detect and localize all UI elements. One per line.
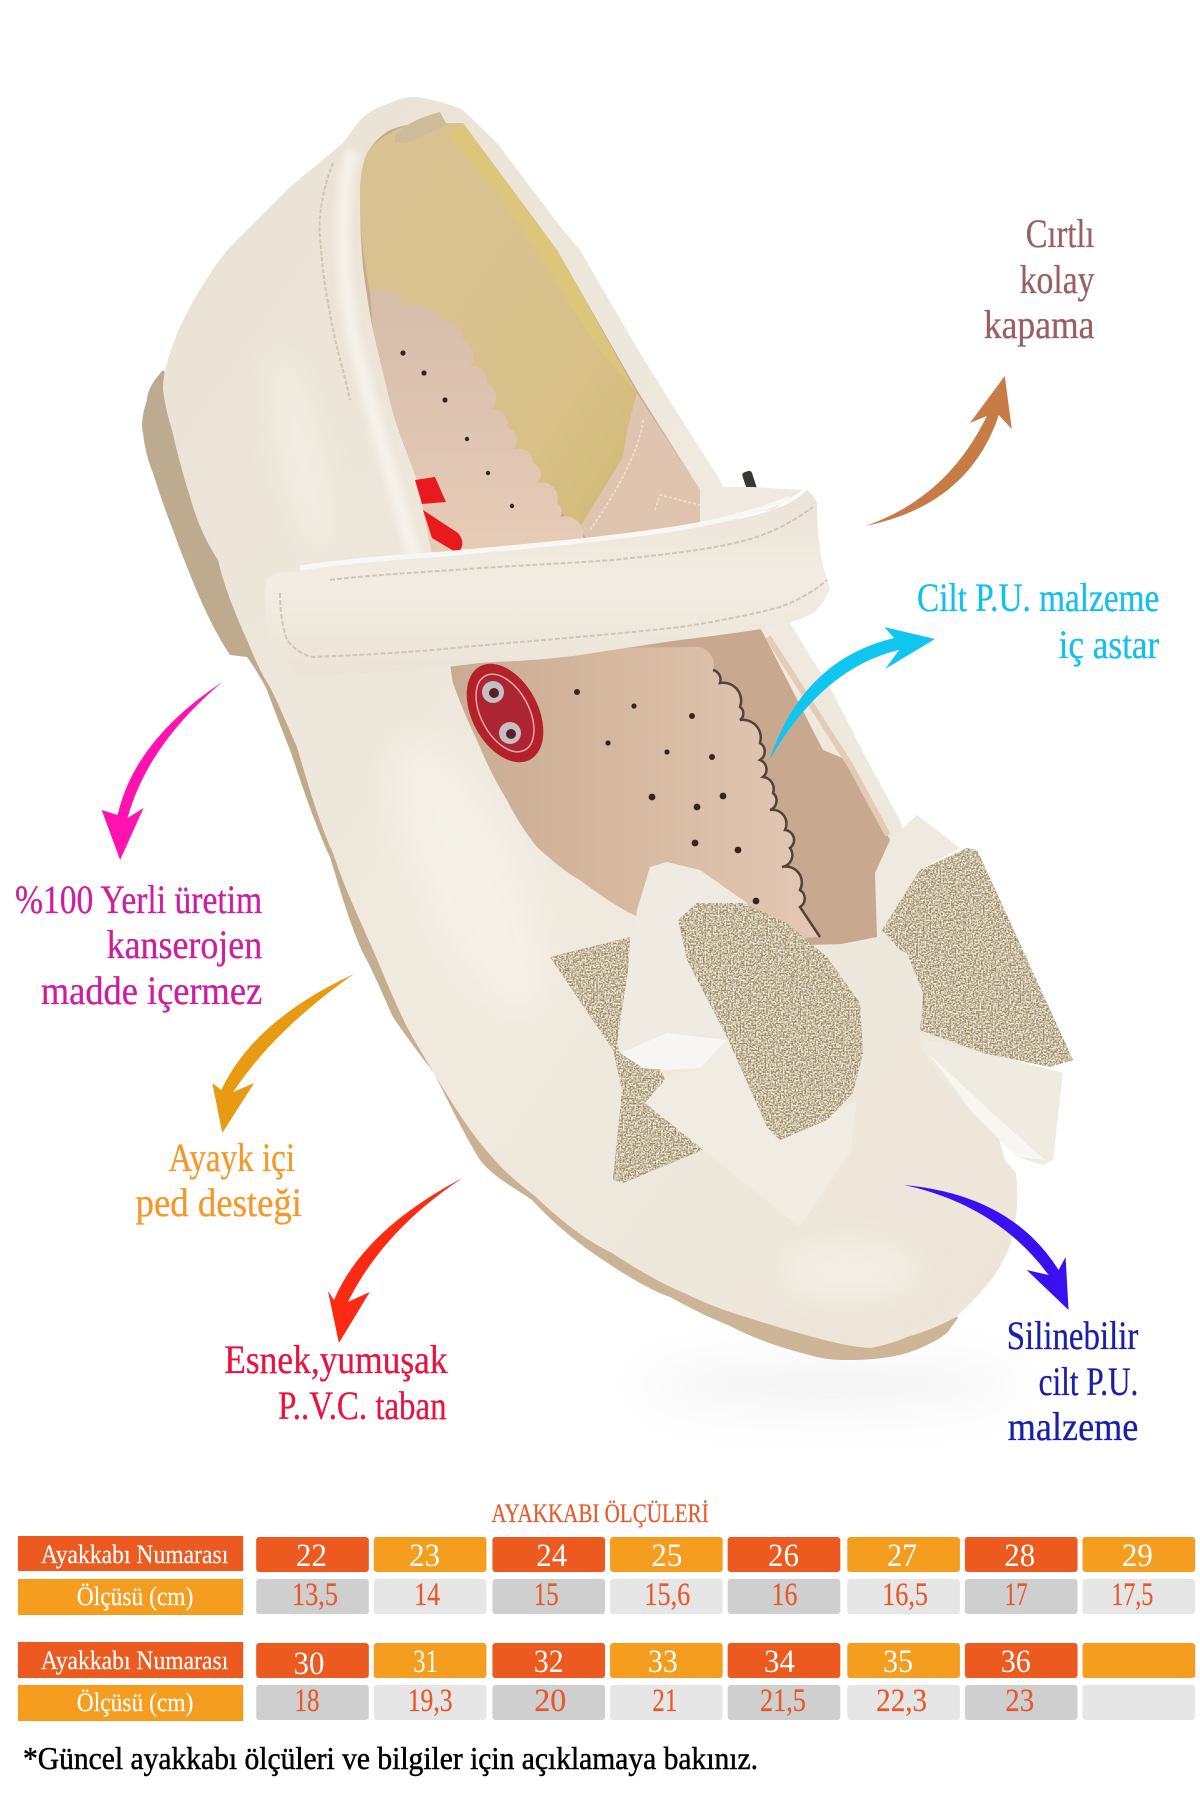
lining padded band: [447, 123, 637, 393]
size row 1 cells: 29: [1122, 1538, 1153, 1574]
measure row 1 cells: 17,5: [1111, 1577, 1153, 1613]
callout: yerli üretim: [15, 682, 262, 1013]
label text: [984, 211, 1095, 347]
label text: Silinebilir: [1007, 1313, 1138, 1358]
measure row 1 cells: 13,5: [292, 1577, 338, 1613]
size row 1 cells: [256, 1537, 1195, 1574]
row labels: Ölçüsü (cm): [77, 1688, 193, 1717]
scallop edge line: [713, 670, 820, 937]
size row 1 cells: 22: [296, 1538, 327, 1574]
label text: P..V.C. taban: [278, 1383, 447, 1428]
insole lower: [448, 647, 820, 945]
label text: kolay: [1020, 257, 1095, 302]
arrow: brown: [865, 376, 1012, 526]
owl badge: [451, 651, 559, 775]
label text: Cilt P.U. malzeme: [917, 575, 1159, 620]
label text: Ayayk içi: [168, 1135, 295, 1180]
size row 1 cells: 25: [651, 1538, 682, 1574]
rear collar fray: [395, 112, 447, 143]
measure row 1 cells: 16,5: [882, 1577, 928, 1613]
arrow: orange: [212, 974, 354, 1133]
size row 2 cells: 36: [1001, 1644, 1031, 1680]
size row 1 cells: 23: [409, 1538, 440, 1574]
strap velcro edge: [300, 498, 790, 568]
collar roll highlight: [343, 150, 415, 560]
measure row 1 cells: 14: [414, 1577, 440, 1613]
upper body: [163, 97, 1017, 1348]
right wing underside: [930, 1055, 1045, 1160]
size row 2 cells: 31: [413, 1644, 438, 1680]
velcro tab: [700, 487, 803, 513]
upper highlights: [252, 337, 920, 1298]
arrow: cyan: [770, 627, 935, 760]
footnote: *Güncel ayakkabı ölçüleri ve bilgiler için açıklamaya bakınız.: [23, 1740, 758, 1776]
label text: ped desteği: [136, 1180, 302, 1225]
measure row 2 cells: 21: [652, 1683, 677, 1719]
insole upper: [370, 289, 590, 560]
size row 2 cells: 32: [534, 1644, 564, 1680]
row labels: Ölçüsü (cm): [77, 1582, 193, 1611]
label text: kapama: [984, 302, 1095, 347]
callout: Cilt P.U. malzeme iç astar: [770, 575, 1159, 760]
label text: [136, 1135, 302, 1225]
size row 1 cells: 24: [536, 1538, 567, 1574]
label text: malzeme: [1008, 1404, 1138, 1449]
measure row 2 cells: 23: [1005, 1683, 1034, 1719]
label text: Cırtlı: [1026, 211, 1094, 256]
label text: Esnek,yumuşak: [224, 1337, 448, 1382]
measure row 1 cells: 15: [534, 1577, 559, 1613]
measure row 2 cells: [256, 1683, 1195, 1720]
size row 2 cells: 35: [883, 1644, 913, 1680]
label text: %100 Yerli üretim: [15, 877, 262, 922]
measure row 1 cells: [256, 1577, 1195, 1614]
label text: [15, 877, 262, 1013]
measure row 2 cells: 19,3: [408, 1683, 453, 1719]
row labels: [18, 1536, 243, 1721]
bow: [550, 815, 1073, 1227]
measure row 2 cells: 21,5: [760, 1683, 806, 1719]
center knot: [807, 943, 923, 1053]
right lower white wing: [917, 1038, 1063, 1165]
size row 1 cells: 27: [887, 1538, 917, 1574]
ground shadow: [640, 1357, 1020, 1413]
left top white wing: [617, 862, 747, 1053]
bottom white tail: [645, 1037, 857, 1227]
label text: cilt P.U.: [1039, 1359, 1138, 1404]
red logo mark: [415, 477, 462, 553]
label text: kanserojen: [107, 922, 262, 967]
callout: PVC taban: [224, 1178, 463, 1428]
callout: silinebilir: [904, 1185, 1138, 1449]
label text: iç astar: [1059, 622, 1159, 667]
opening inner wall: [360, 123, 890, 960]
size row 2 cells: 33: [648, 1644, 678, 1680]
measure row 1 cells: 15,6: [644, 1577, 690, 1613]
measure row 1 cells: 17: [1005, 1577, 1028, 1613]
measure row 2 cells: 18: [295, 1683, 319, 1719]
size row 1 cells: 28: [1004, 1538, 1035, 1574]
arrow: magenta: [102, 682, 222, 860]
row labels: Ayakkabı Numarası: [41, 1540, 228, 1569]
right glitter wing: [882, 848, 1073, 1067]
size row 1 cells: 26: [768, 1538, 799, 1574]
wing fold underside: [620, 1033, 727, 1070]
inner wall pink edge: [768, 637, 888, 835]
measure row 2 cells: 22,3: [876, 1683, 927, 1719]
shoe photo illustration: [142, 97, 1073, 1413]
size row 2 cells: 30: [294, 1646, 324, 1682]
strap: [265, 490, 830, 677]
arrow: red: [328, 1178, 463, 1343]
right top white wing: [875, 815, 960, 937]
label text: madde içermez: [41, 968, 262, 1013]
table title: AYAKKABI ÖLÇÜLERİ: [491, 1499, 709, 1528]
pink panel: [580, 393, 700, 540]
label text: [917, 575, 1159, 667]
snap detail: [742, 470, 758, 496]
heel stitching: [320, 163, 350, 400]
size row 2 cells: 34: [764, 1644, 795, 1680]
pink panel stitching: [590, 420, 700, 530]
measure row 2 cells: 20: [534, 1683, 566, 1719]
sole: [142, 370, 958, 1360]
label text: [224, 1337, 448, 1428]
measure row 1 cells: 16: [772, 1577, 797, 1613]
left front glitter wing: [678, 903, 863, 1140]
insole holes: [400, 350, 759, 904]
size table: [18, 1499, 1195, 1721]
inner lining: [360, 123, 637, 537]
left rear glitter wing: [550, 937, 703, 1183]
arrow: blue: [904, 1185, 1069, 1310]
callout: Cırtlı kolay kapama: [865, 211, 1095, 526]
label text: [1007, 1313, 1138, 1449]
size row 2 cells: [256, 1643, 1195, 1682]
callout: ayak içi ped: [136, 974, 354, 1225]
row labels: Ayakkabı Numarası: [41, 1646, 228, 1675]
strap stitching: [280, 507, 827, 657]
